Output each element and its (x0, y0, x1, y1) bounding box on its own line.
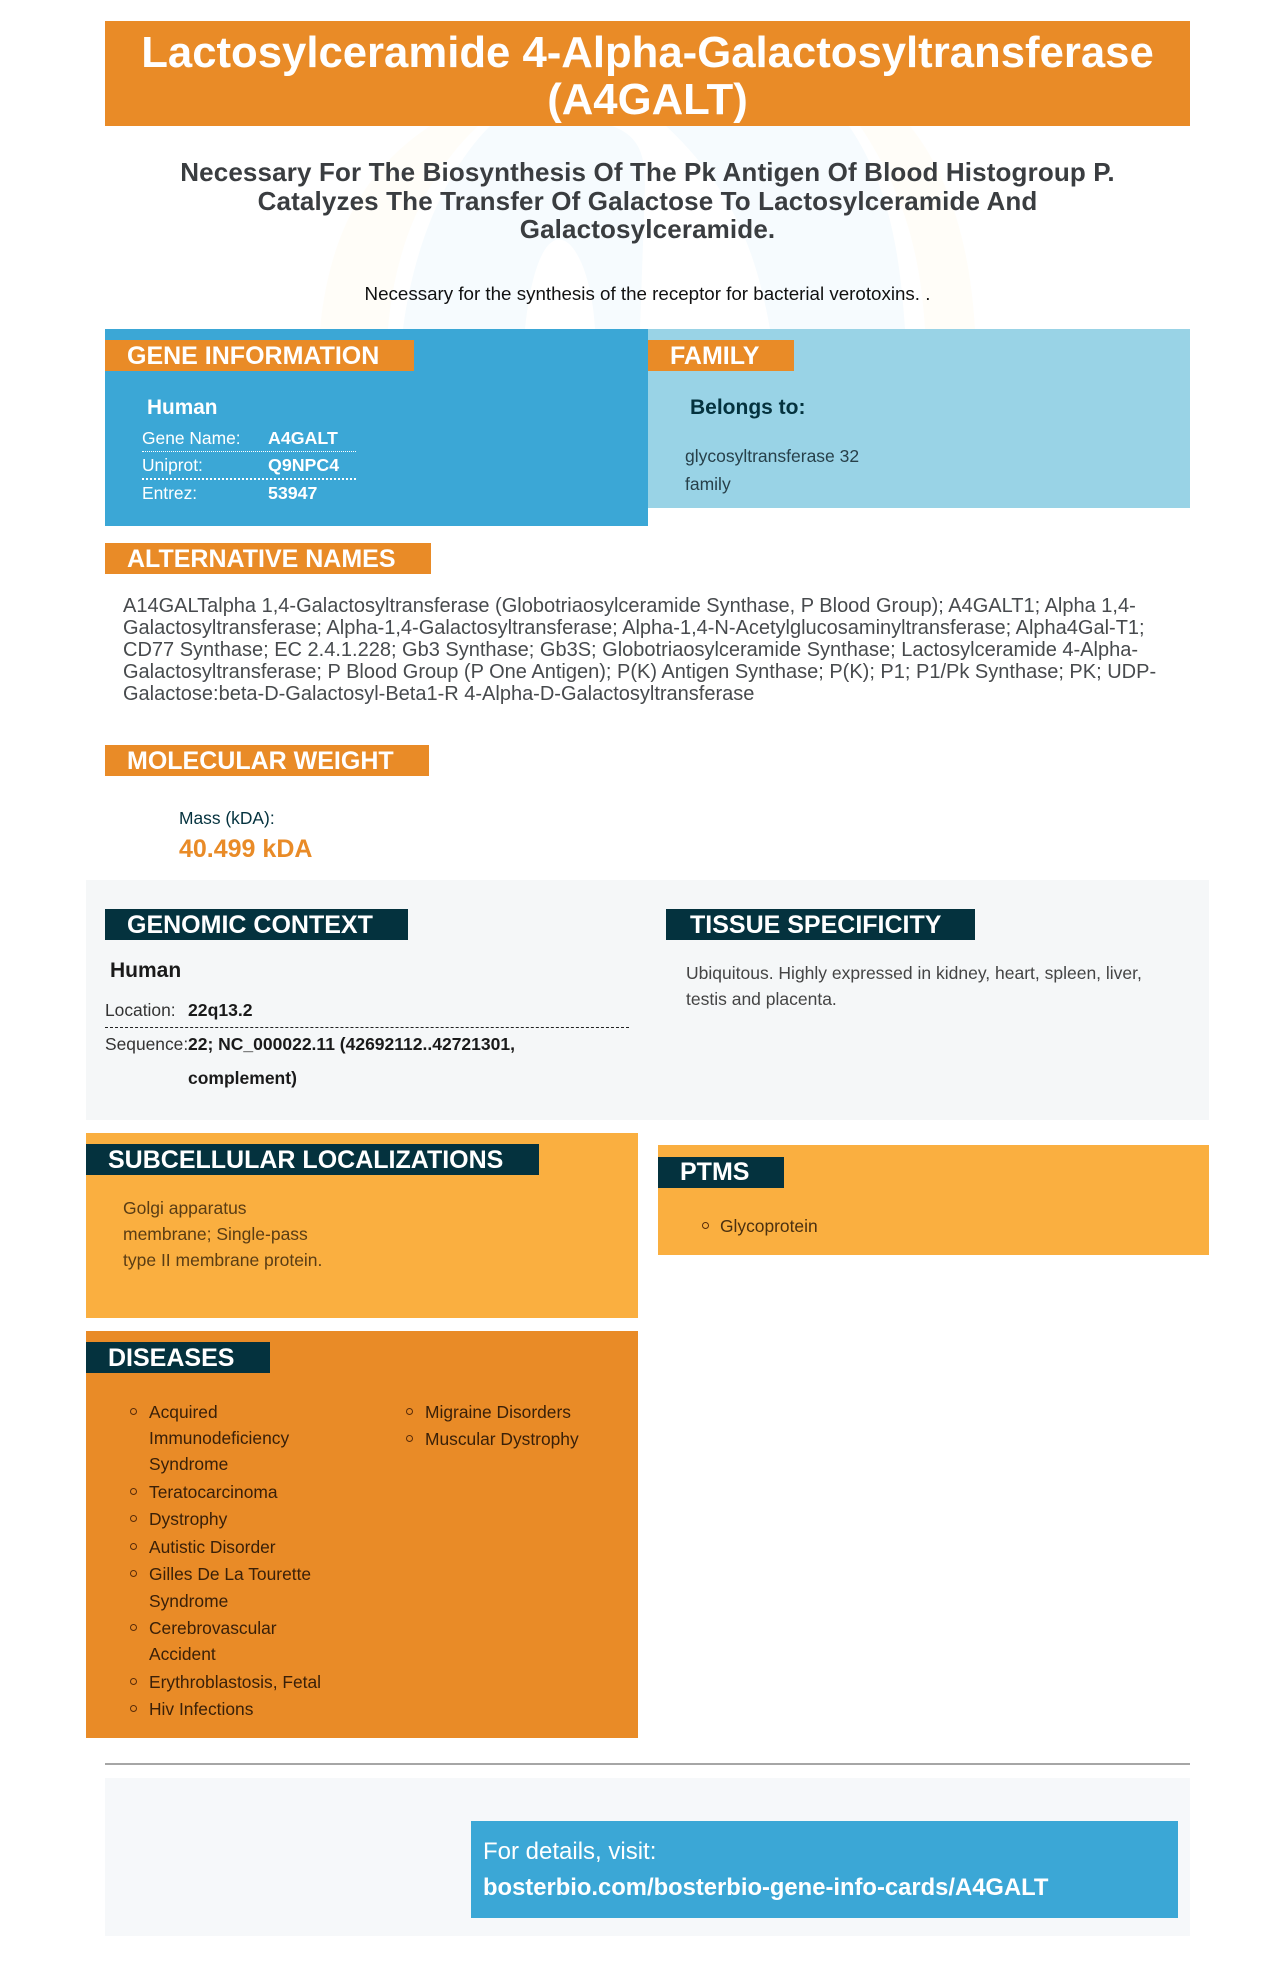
disease list column 1: Hiv Infections (149, 1699, 253, 1719)
ptm item: Glycoprotein (720, 1216, 818, 1236)
panel: footer (105, 1778, 1190, 1936)
species label: Human (110, 959, 181, 982)
localization text: membrane; Single-pass (123, 1224, 308, 1244)
heading: molecular weight: MOLECULAR WEIGHT (127, 747, 394, 775)
title banner: (A4GALT) (547, 75, 748, 124)
title banner (105, 21, 1190, 126)
subtitle: Catalyzes The Transfer Of Galactose To Lactosylceramide And (258, 186, 1037, 216)
heading: ptms: PTMS (680, 1158, 749, 1186)
panel: subcellular localizations (86, 1133, 638, 1318)
heading: alternative names: ALTERNATIVE NAMES (127, 545, 396, 573)
panel: gene information (105, 329, 648, 526)
tissue specificity text (686, 963, 1142, 1009)
bullet (702, 1222, 709, 1229)
family text (685, 446, 859, 494)
family text: family (685, 474, 731, 494)
disease list column 1: Cerebrovascular (149, 1618, 277, 1638)
background watermark (403, 126, 905, 329)
gene table: Gene Name: (142, 428, 241, 448)
subtitle (180, 157, 1115, 244)
panel: ptms (658, 1145, 1209, 1255)
gene table (142, 428, 356, 503)
belongs to label: Belongs to: (690, 396, 806, 419)
heading: diseases: DISEASES (108, 1344, 234, 1372)
localization text: Golgi apparatus (123, 1198, 247, 1218)
disease list column 1: Syndrome (149, 1454, 228, 1474)
location row: 22; NC_000022.11 (42692112..42721301, (188, 1034, 515, 1054)
disease list column 1: Gilles De La Tourette (149, 1564, 311, 1584)
visit label: For details, visit: (483, 1838, 656, 1865)
disease list column 2: Migraine Disorders (425, 1402, 571, 1422)
mass value: 40.499 kDA (179, 835, 312, 863)
callout: details link (471, 1821, 1178, 1918)
alternative names text: CD77 Synthase; EC 2.4.1.228; Gb3 Synthase; Gb3S; Globotriaosylceramide Synthase; Lactosylceramide 4-Alpha- (123, 639, 1138, 661)
heading: family (648, 340, 794, 371)
localization text (123, 1198, 322, 1270)
heading: ptms (658, 1157, 784, 1188)
disease list column 1: Acquired (149, 1402, 218, 1422)
heading: genomic context: GENOMIC CONTEXT (127, 911, 373, 939)
disease list column 1: Teratocarcinoma (149, 1482, 278, 1502)
disease list column 1: Autistic Disorder (149, 1537, 276, 1557)
heading: diseases (86, 1342, 270, 1373)
disease list column 1 (130, 1402, 321, 1719)
disease list column 2: Muscular Dystrophy (425, 1429, 579, 1449)
alternative names text: Galactosyltransferase; P Blood Group (P One Antigen); P(K) Antigen Synthase; P(K); P1; P1/Pk Synthase; PK; UDP- (123, 661, 1156, 683)
subtitle: Necessary For The Biosynthesis Of The Pk Antigen Of Blood Histogroup P. (180, 157, 1115, 187)
location row: Sequence: (105, 1034, 188, 1054)
location row: complement) (188, 1068, 297, 1088)
function description: Necessary for the synthesis of the receptor for bacterial verotoxins. . (365, 283, 930, 304)
species label: Human (147, 396, 217, 419)
family text: glycosyltransferase 32 (685, 446, 859, 466)
alternative names text: A14GALTalpha 1,4-Galactosyltransferase (Globotriaosylceramide Synthase, P Blood Group); A4GALT1; Alpha 1,4- (123, 595, 1136, 617)
heading: family: FAMILY (670, 342, 759, 370)
alternative names text: Galactosyltransferase; Alpha-1,4-Galactosyltransferase; Alpha-1,4-N-Acetylglucosaminyltransferase; Alpha4Gal-T1; (123, 617, 1145, 639)
tissue specificity text: Ubiquitous. Highly expressed in kidney, heart, spleen, liver, (686, 963, 1142, 983)
panel: diseases (86, 1331, 638, 1738)
alternative names text: Galactose:beta-D-Galactosyl-Beta1-R 4-Alpha-D-Galactosyltransferase (123, 683, 754, 705)
disease list column 2 (406, 1402, 579, 1449)
disease list column 1: Immunodeficiency (149, 1428, 289, 1448)
location row (105, 1000, 629, 1088)
alternative names text (123, 595, 1156, 705)
disease list column 1: Syndrome (149, 1591, 228, 1611)
tissue specificity text: testis and placenta. (686, 989, 837, 1009)
panel: family (648, 329, 1190, 508)
heading: subcellular localizations: SUBCELLULAR LOCALIZATIONS (108, 1146, 503, 1174)
heading: tissue specificity: TISSUE SPECIFICITY (690, 911, 941, 939)
gene table: Q9NPC4 (268, 455, 339, 475)
gene table: Uniprot: (142, 455, 203, 475)
title banner: Lactosylceramide 4-Alpha-Galactosyltransferase (141, 28, 1154, 77)
location row: Location: (105, 1000, 176, 1020)
gene table: Entrez: (142, 483, 197, 503)
mass label: Mass (kDA): (179, 808, 275, 828)
link text: bosterbio.com/bosterbio-gene-info-cards/A4GALT (483, 1874, 1048, 1901)
subtitle: Galactosylceramide. (520, 214, 775, 244)
location row: 22q13.2 (188, 1000, 253, 1020)
gene table: 53947 (268, 483, 317, 503)
disease list column 1: Erythroblastosis, Fetal (149, 1672, 321, 1692)
localization text: type II membrane protein. (123, 1250, 322, 1270)
gene table: A4GALT (268, 428, 338, 448)
disease list column 1: Accident (149, 1644, 216, 1664)
panel: genomic context and tissue specificity (86, 880, 1209, 1120)
disease list column 1: Dystrophy (149, 1509, 227, 1529)
heading: gene information: GENE INFORMATION (127, 342, 379, 370)
